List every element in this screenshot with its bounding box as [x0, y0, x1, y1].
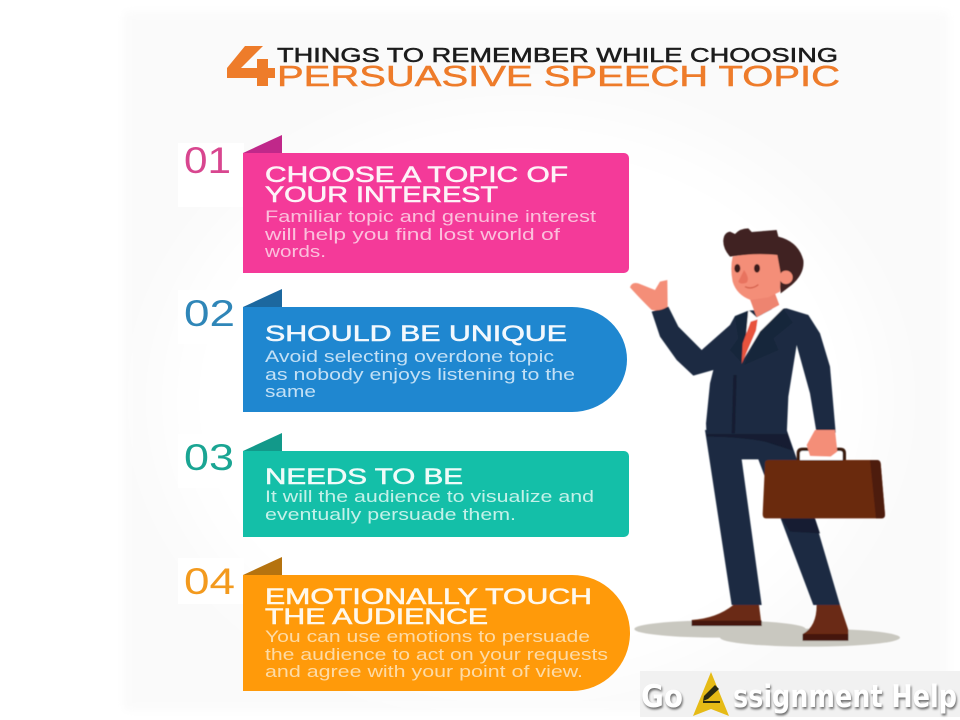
- title: PERSUASIVE SPEECH TOPIC: [277, 61, 840, 93]
- panel 03: needs to be: 03: [184, 437, 234, 478]
- big number 4: [227, 46, 275, 86]
- panel 04: emotionally touch: THE AUDIENCE: [265, 604, 488, 629]
- panel 04: emotionally touch: the audience to act on your requests: [265, 646, 608, 664]
- businessman figure: [630, 228, 900, 647]
- panel 01: choose a topic: Familiar topic and genuine interest: [265, 208, 597, 226]
- nose: [738, 270, 748, 284]
- icon: yellow A with pen: [693, 672, 729, 716]
- panel 01: choose a topic: words.: [264, 243, 326, 261]
- panel 04: emotionally touch: and agree with your point of view.: [265, 663, 583, 681]
- panel 03: needs to be: eventually persuade them.: [265, 506, 516, 524]
- panel 04: emotionally touch: [178, 557, 630, 691]
- title: [227, 45, 840, 93]
- panel 04: emotionally touch: EMOTIONALLY TOUCH: [265, 584, 592, 609]
- lapels: [730, 312, 747, 364]
- panel 01: choose a topic: will help you find lost world of: [264, 226, 561, 244]
- panel 02: should be unique: same: [265, 383, 316, 401]
- panel 02: should be unique: 02: [184, 293, 235, 334]
- title: THINGS TO REMEMBER WHILE CHOOSING: [277, 45, 838, 67]
- ground shadow: [634, 620, 900, 647]
- panel 03: needs to be: [178, 433, 629, 537]
- panel 01: choose a topic: CHOOSE A TOPIC OF: [265, 162, 568, 187]
- panel 04: emotionally touch: 04: [184, 561, 235, 602]
- neck: [750, 293, 779, 317]
- panel 01: choose a topic: [178, 135, 629, 273]
- shirt collar: [744, 305, 783, 358]
- panel 01: choose a topic: 01: [184, 140, 231, 181]
- panel 01: choose a topic: YOUR INTEREST: [265, 182, 498, 207]
- panel 04: emotionally touch: You can use emotions to persuade: [265, 628, 590, 646]
- torso and arms: [630, 228, 836, 447]
- smile: [745, 285, 758, 288]
- panel 02: should be unique: [178, 289, 627, 412]
- head: [731, 254, 781, 300]
- panel 03: needs to be: NEEDS TO BE: [265, 464, 463, 489]
- watermark logo: Go Assignment Help: Go: [641, 679, 683, 715]
- red tie: [742, 319, 758, 364]
- hair back: [723, 228, 804, 293]
- panel 02: should be unique: SHOULD BE UNIQUE: [265, 321, 567, 346]
- ear: [779, 271, 793, 284]
- panel 02: should be unique: Avoid selecting overdone topic: [265, 348, 554, 366]
- panel 03: needs to be: It will the audience to visualize and: [265, 488, 594, 506]
- raised hand: [630, 280, 668, 310]
- legs and shoes: [692, 430, 848, 641]
- eyes: [734, 264, 740, 273]
- watermark logo: Go Assignment Help: [640, 671, 960, 717]
- panel 02: should be unique: as nobody enjoys listening to the: [265, 366, 575, 384]
- briefcase and holding hand: [763, 430, 885, 518]
